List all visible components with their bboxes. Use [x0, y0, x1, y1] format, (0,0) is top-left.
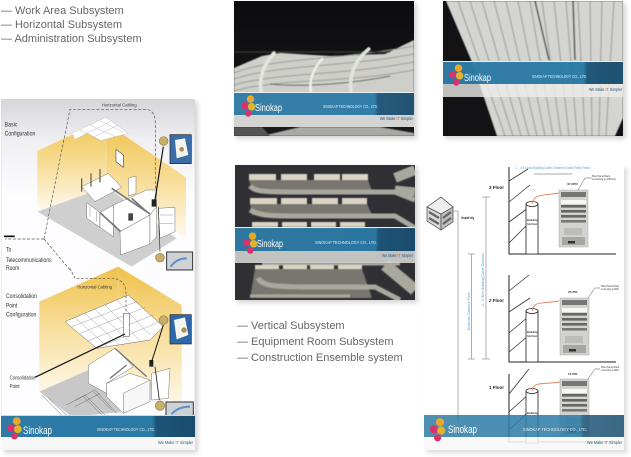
- photo: cable bundle with ties: [234, 1, 417, 139]
- diagram: basic configuration room: Room: [6, 266, 19, 272]
- floor: 1 Floor: Building: [527, 411, 538, 415]
- floor: 2 Floor: 2 Floor: [489, 298, 504, 303]
- diagram: basic configuration room: Basic: [5, 123, 17, 129]
- heading list: left subsystems: — Administration Subsystem: [1, 33, 142, 45]
- diagram: consolidation point room: [6, 267, 193, 425]
- photo: patch panels in rack: SINOKAP TECHNOLOGY CO., LTD.: [315, 240, 377, 245]
- text list: lower subsystems: [237, 320, 403, 364]
- floor: 3 Floor: Cable Channel: [527, 222, 537, 226]
- floor: 3 Floor: 3 Floor: [489, 185, 504, 190]
- floor: 2 Floor: 2F IPR: [568, 290, 578, 294]
- banner: Sinokap on diagram: [1, 415, 195, 450]
- diagram: basic configuration room: Horizontal Cabling: [102, 103, 137, 108]
- floor: 1 Floor: [489, 365, 620, 443]
- photo: vertical cable run: We Make IT Simple!: [589, 87, 622, 92]
- diagram: consolidation point room: Consolidation: [6, 294, 37, 300]
- panel: building wiring diagram: [1, 99, 198, 453]
- diagram: consolidation point room: Point: [10, 384, 20, 390]
- banner: Sinokap on diagram: SINOKAP TECHNOLOGY CO., LTD.: [97, 427, 155, 433]
- text list: lower subsystems: — Equipment Room Subsystem: [237, 336, 394, 348]
- banner: Sinokap on diagram: Sinokap: [23, 425, 52, 437]
- panel: multi-floor vertical cabling diagram: 1 - 3 ft Cross Building Cable Channel to Main Patch Panel: [516, 166, 590, 170]
- photo: cable bundle with ties: Sinokap: [255, 102, 282, 114]
- photo: vertical cable run: SINOKAP TECHNOLOGY CO., LTD.: [532, 74, 587, 79]
- banner: Sinokap on floor diagram: [424, 415, 624, 450]
- diagram: basic configuration room: To: [6, 247, 12, 253]
- floor: 2 Floor: connecting to MDF: [601, 287, 619, 291]
- photo: cable bundle with ties: We Make IT Simple!: [380, 116, 413, 121]
- floor: 1 Floor: 1F IPR: [568, 372, 578, 376]
- floor: 2 Floor: Plan Panel Rack: [601, 284, 620, 288]
- floor: 1 Floor: Plan Panel Rack: [601, 365, 620, 369]
- banner: Sinokap on diagram: We Make IT Simple!: [158, 440, 193, 445]
- icon: main building: [427, 197, 453, 230]
- diagram: consolidation point room: Configuration: [6, 313, 36, 319]
- floor: 3 Floor: connecting to 2/3th Hor: [592, 177, 616, 181]
- photo: vertical cable run: Sinokap: [464, 72, 491, 84]
- heading list: left subsystems: — Work Area Subsystem: [1, 5, 124, 17]
- floor: 3 Floor: 3F RPR: [567, 182, 579, 186]
- text list: lower subsystems: — Vertical Subsystem: [237, 320, 345, 332]
- banner: Sinokap on floor diagram: We Make IT Simple!: [587, 440, 622, 445]
- floor: 2 Floor: Building: [527, 330, 538, 334]
- photo: vertical cable run: [443, 1, 626, 139]
- vertical measurement lines: [453, 197, 490, 420]
- text list: lower subsystems: — Construction Ensemble system: [237, 352, 403, 364]
- panel: multi-floor vertical cabling diagram: [424, 165, 627, 453]
- photo: cable bundle with ties: SINOKAP TECHNOLOGY CO., LTD.: [323, 104, 378, 109]
- diagram: consolidation point room: Horizontal Cabling: [77, 285, 112, 291]
- diagram: consolidation point room: Consolidation: [10, 376, 35, 382]
- panel: multi-floor vertical cabling diagram: Minimum Distance Floor: [467, 291, 471, 330]
- heading list: left subsystems: — Horizontal Subsystem: [1, 19, 122, 31]
- photo: patch panels in rack: [235, 165, 418, 303]
- panel: multi-floor vertical cabling diagram: 2 - 3 Wire Building Cable Channel: [481, 253, 485, 306]
- heading list: left subsystems: [1, 5, 142, 45]
- diagram: basic configuration room: Telecommunications: [6, 258, 52, 264]
- floor: 1 Floor: 1 Floor: [489, 385, 504, 390]
- floor: 3 Floor: Building: [527, 218, 538, 222]
- photo: patch panels in rack: Sinokap: [257, 238, 283, 250]
- floor: 1 Floor: connecting to MDF: [601, 368, 619, 372]
- photo: patch panels in rack: We Make IT Simple!: [382, 253, 413, 258]
- floor: 3 Floor: Plan Panel Rack: [592, 174, 611, 178]
- panel: multi-floor vertical cabling diagram: Hospital bldg: [461, 216, 474, 220]
- diagram: basic configuration room: Configuration: [5, 132, 35, 138]
- banner: Sinokap on floor diagram: SINOKAP TECHNOLOGY CO., LTD.: [523, 427, 587, 433]
- floor: 3 Floor: [489, 167, 616, 254]
- floor: 2 Floor: Cable Channel: [527, 334, 537, 338]
- banner: Sinokap on floor diagram: Sinokap: [448, 424, 477, 436]
- floor: 2 Floor: [489, 275, 620, 362]
- diagram: consolidation point room: Point: [6, 303, 18, 309]
- diagram: basic configuration room: [4, 103, 193, 272]
